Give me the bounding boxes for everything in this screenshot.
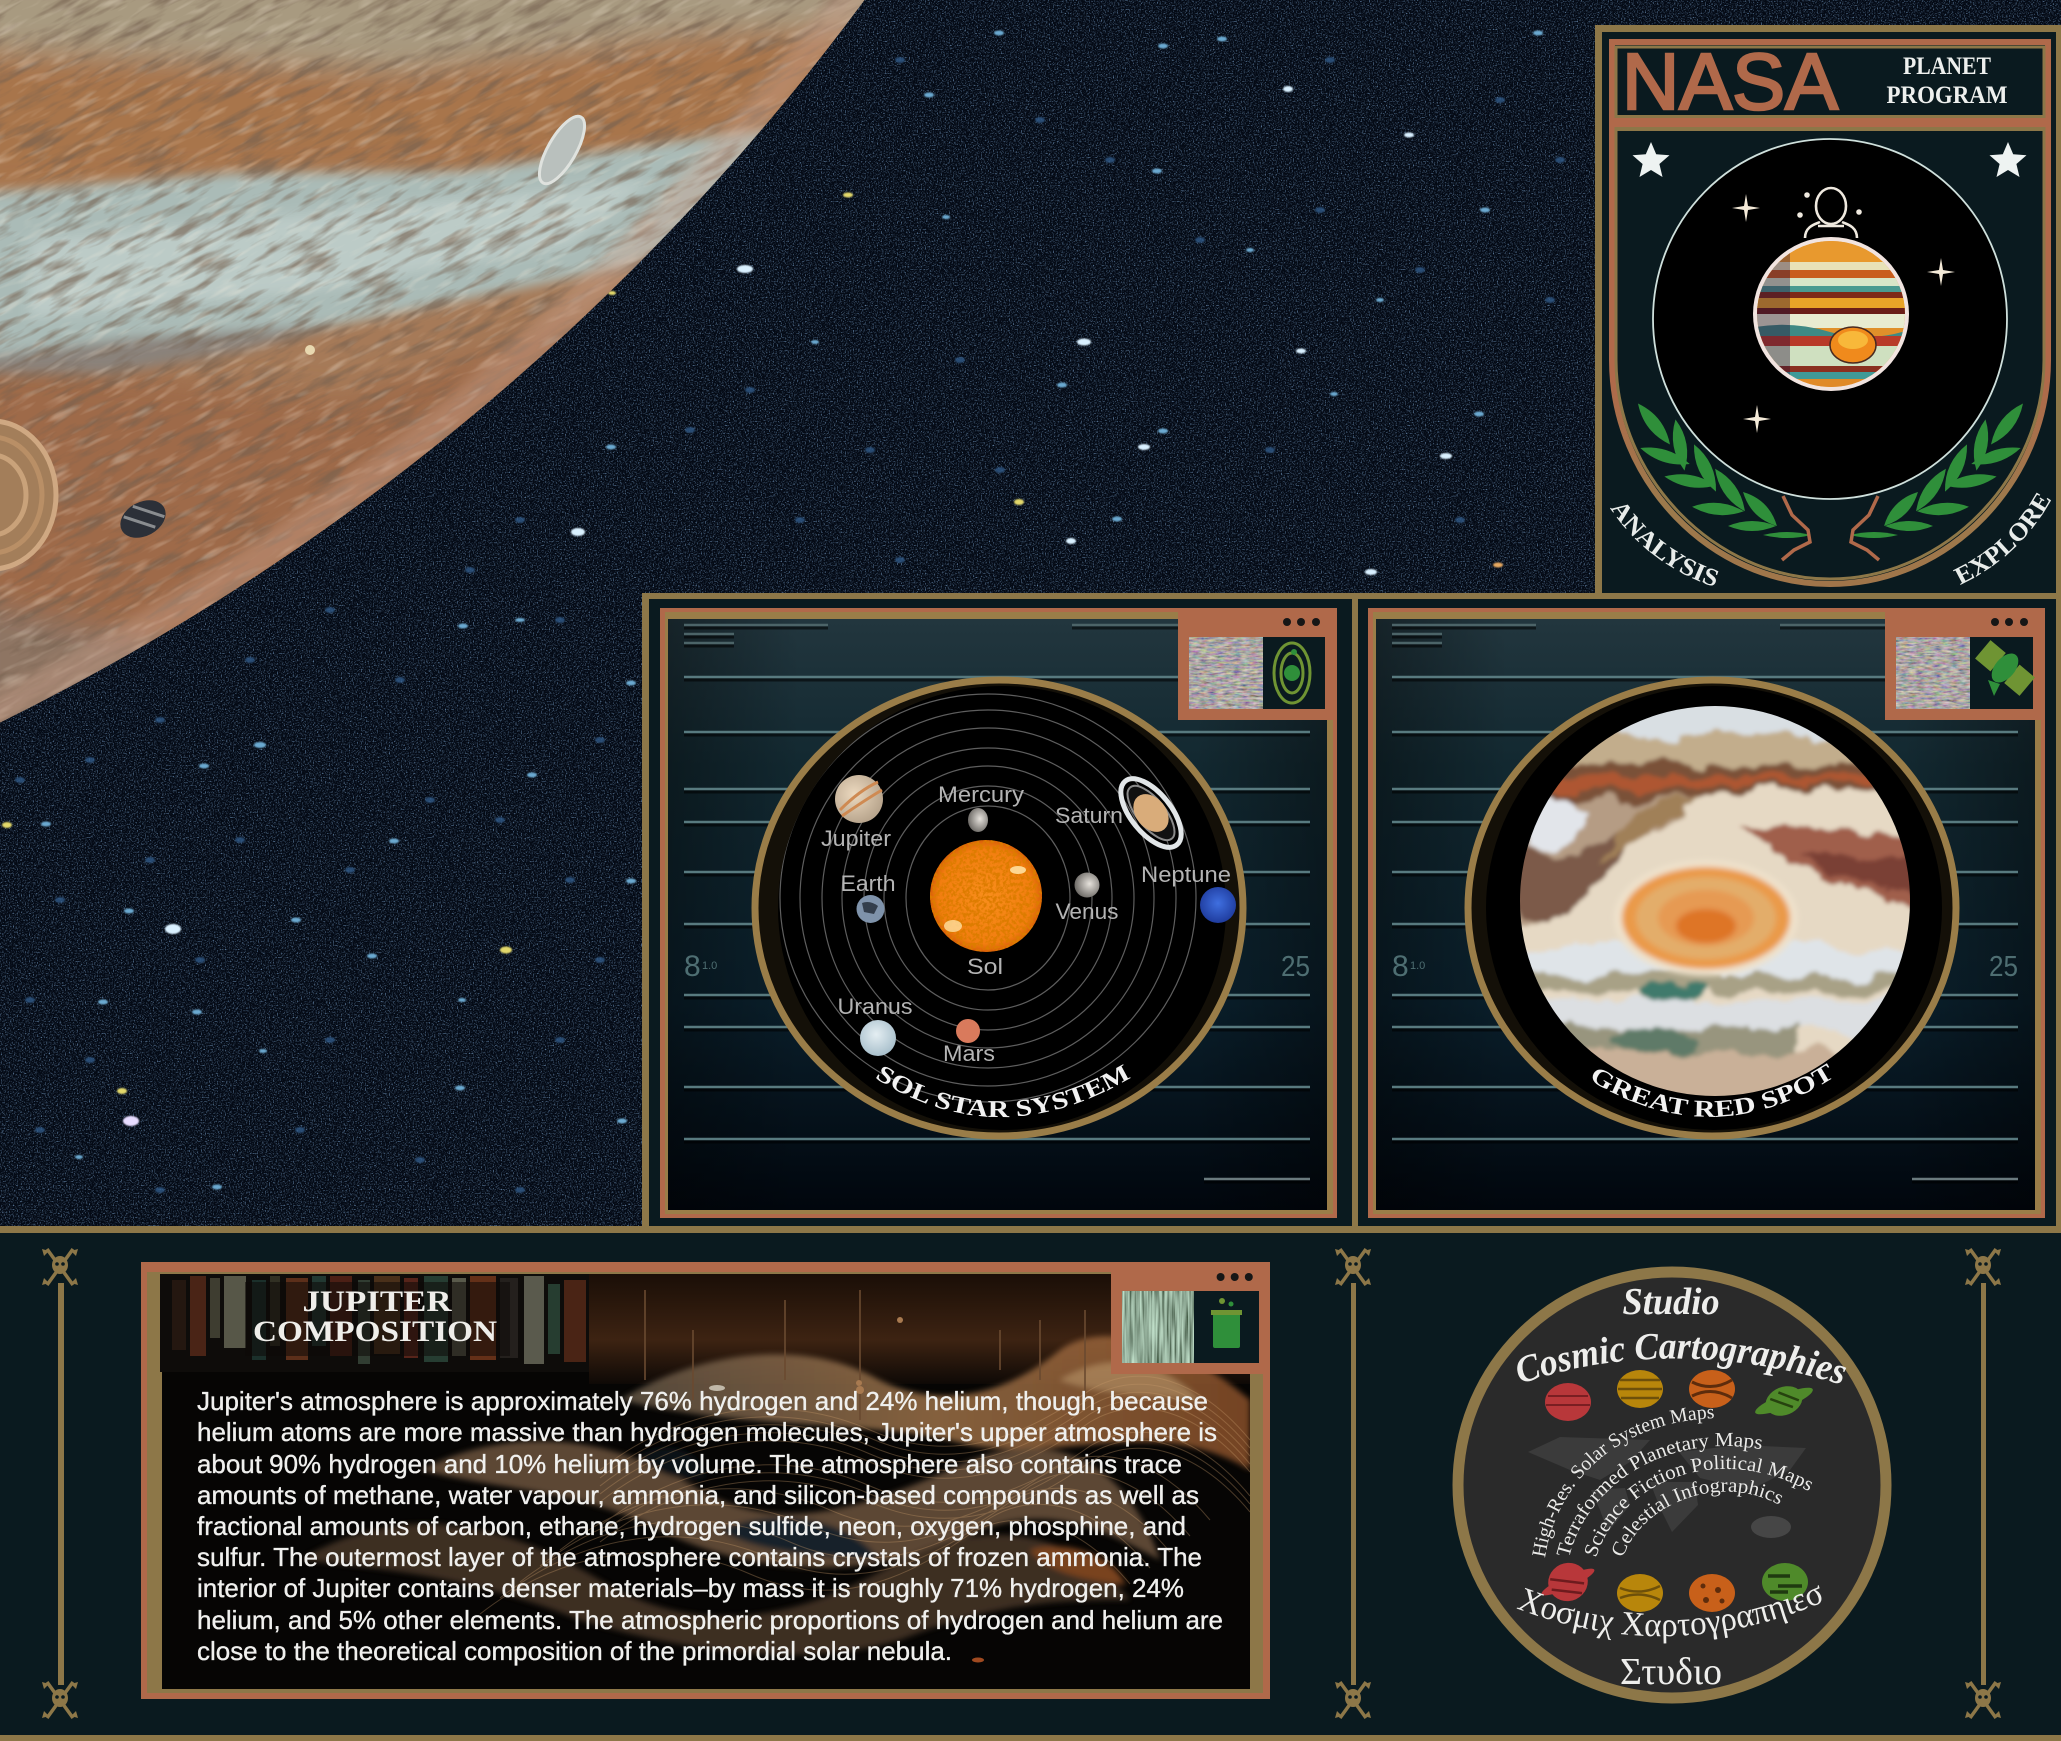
white oval storm bbox=[538, 114, 586, 186]
planet labels: Neptune bbox=[1141, 862, 1231, 887]
ornamental column dividers bbox=[42, 1249, 2001, 1718]
planet icons bbox=[1534, 1370, 1818, 1612]
curved motto: EXPLORE bbox=[1953, 492, 2051, 585]
sparkles bbox=[1732, 194, 1955, 433]
body text: about 90% hydrogen and 10% helium by volume. The atmosphere also contains trace bbox=[197, 1449, 1182, 1479]
panel: Jupiter composition bbox=[141, 1262, 1270, 1699]
studio logo roundel bbox=[1452, 1266, 1892, 1704]
panel: Sol star system bbox=[660, 608, 1337, 1218]
blackletter title bbox=[1517, 1281, 1846, 1384]
body text: helium, and 5% other elements. The atmospheric proportions of hydrogen and helium are bbox=[197, 1605, 1223, 1635]
planet labels: Saturn bbox=[1055, 803, 1123, 828]
dark storm spot bbox=[120, 500, 166, 538]
sun bbox=[930, 840, 1042, 952]
curved caption: SOL STAR SYSTEM bbox=[876, 1064, 1131, 1118]
body text: interior of Jupiter contains denser materials–by mass it is roughly 71% hydrogen, 24% bbox=[197, 1573, 1184, 1603]
body text bbox=[197, 1386, 1223, 1666]
planet labels: Sol bbox=[967, 954, 1003, 979]
body text: sulfur. The outermost layer of the atmosphere contains crystals of frozen ammonia. The bbox=[197, 1542, 1202, 1572]
planet labels: Earth bbox=[840, 871, 896, 896]
astronaut bbox=[1798, 188, 1860, 238]
badge stars bbox=[1632, 142, 2026, 177]
body text: helium atoms are more massive than hydrogen molecules, Jupiter's upper atmosphere is bbox=[197, 1417, 1217, 1447]
laurel wreath bbox=[1633, 400, 2028, 560]
curved motto: ANALYSIS bbox=[1610, 504, 1718, 586]
planet labels: Venus bbox=[1056, 899, 1118, 924]
services arc text: High-Res. Solar System Maps bbox=[1532, 1408, 1714, 1558]
black roundel bbox=[1653, 139, 2007, 499]
planets bbox=[835, 769, 1236, 1056]
body text: Jupiter's atmosphere is approximately 76% hydrogen and 24% helium, though, because bbox=[197, 1386, 1208, 1416]
services arc text: Celestial Infographics bbox=[1612, 1480, 1782, 1556]
blackletter title: Studio bbox=[1622, 1281, 1720, 1323]
panel: Great Red Spot bbox=[1368, 608, 2045, 1218]
faint world map bbox=[1528, 1437, 1806, 1538]
Greek studio name: Στυδιο bbox=[1620, 1651, 1722, 1693]
measurement lines bbox=[1392, 625, 2018, 1182]
Great Red Spot image bbox=[1520, 706, 1910, 1096]
panel dark fills bbox=[649, 32, 2056, 1226]
starfield background bbox=[0, 0, 2061, 1226]
system roundel bbox=[755, 680, 1243, 1136]
window widget bbox=[1111, 1262, 1270, 1374]
title book-spine banner bbox=[160, 1274, 589, 1372]
planet labels bbox=[821, 782, 1231, 1066]
services arc text: Terraformed Planetary Maps bbox=[1556, 1432, 1762, 1555]
abstract wave artwork bbox=[300, 1274, 1250, 1662]
program title bbox=[1886, 53, 2008, 109]
NASA wordmark: NASA bbox=[1622, 37, 1839, 126]
curved motto bbox=[1610, 492, 2051, 586]
planet Jupiter close-up bbox=[0, 0, 864, 722]
concentric storm on limb bbox=[0, 421, 56, 569]
services arc text: Science Fiction Political Maps bbox=[1585, 1455, 1812, 1556]
services arc text bbox=[1532, 1408, 1812, 1558]
planet labels: Jupiter bbox=[821, 826, 891, 851]
window widget bbox=[1885, 608, 2045, 720]
planet labels: Mars bbox=[943, 1041, 995, 1066]
panel title: COMPOSITION bbox=[253, 1315, 497, 1348]
body text: close to the theoretical composition of the primordial solar nebula. bbox=[197, 1636, 952, 1666]
Greek studio name bbox=[1516, 1585, 1822, 1693]
viewport roundel bbox=[1468, 680, 1956, 1136]
measurement lines bbox=[684, 625, 1310, 1182]
planet labels: Mercury bbox=[938, 782, 1024, 807]
program title: PROGRAM bbox=[1886, 82, 2008, 109]
panel: NASA mission badge bbox=[1609, 37, 2051, 587]
panel title bbox=[253, 1285, 497, 1348]
orbit rings bbox=[780, 694, 1196, 1102]
window widget bbox=[1178, 608, 1337, 720]
Jupiter emblem bbox=[1750, 237, 1915, 391]
Greek studio name: Χοσμιχ Χαρτογραπηιεσ bbox=[1516, 1585, 1822, 1644]
planet labels: Uranus bbox=[838, 994, 912, 1019]
curved caption: GREAT RED SPOT bbox=[1592, 1063, 1832, 1117]
body text: amounts of methane, water vapour, ammonia, and silicon-based compounds as well as bbox=[197, 1480, 1199, 1510]
panel title: JUPITER bbox=[302, 1285, 452, 1318]
body text: fractional amounts of carbon, ethane, hydrogen sulfide, neon, oxygen, phosphine, and bbox=[197, 1511, 1186, 1541]
program title: PLANET bbox=[1903, 53, 1991, 80]
blackletter title: Cosmic Cartographies bbox=[1517, 1334, 1846, 1384]
